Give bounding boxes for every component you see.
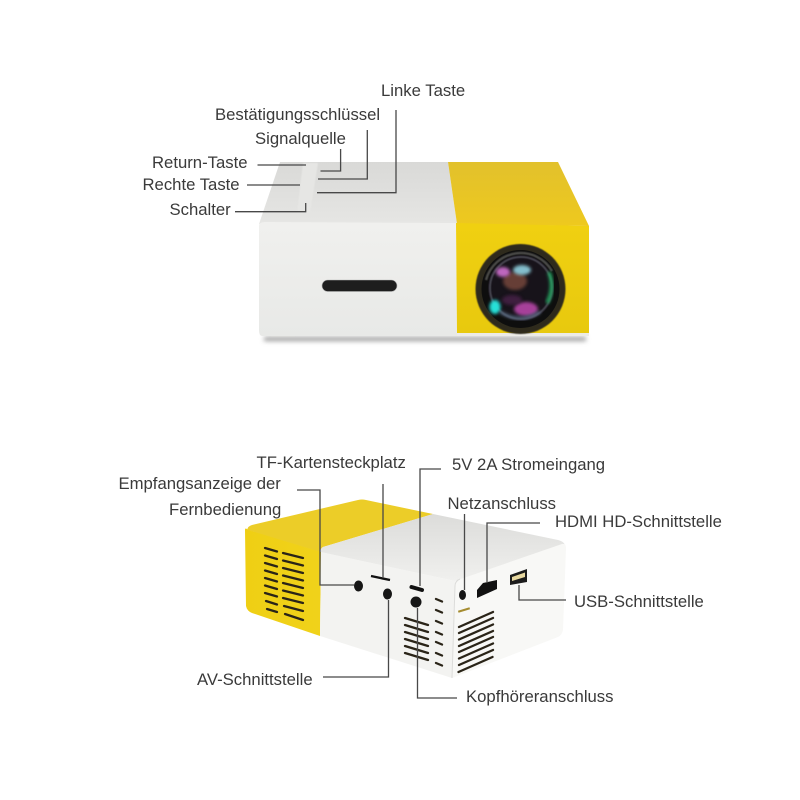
label: Bestätigungsschlüssel [215,105,380,179]
yellow front face [456,223,589,333]
label: Kopfhöreranschluss: Kopfhöreranschluss [466,687,614,706]
label: AV-Schnittstelle [197,600,388,689]
end face edge [452,579,460,678]
label: TF-Kartensteckplatz: TF-Kartensteckplatz [256,453,406,472]
shadow [264,337,586,341]
white top face [259,162,457,224]
lens [476,244,566,334]
label: Signalquelle: Signalquelle [255,129,346,148]
label: Return-Taste: Return-Taste [152,153,248,172]
label: Bestätigungsschlüssel: Bestätigungsschlüssel [215,105,380,124]
speaker slot [322,280,397,292]
front projector illustration [259,162,589,341]
end ports [459,590,466,600]
side vents [405,618,428,660]
label: USB-Schnittstelle: USB-Schnittstelle [574,592,704,611]
label: Schalter [170,200,306,219]
feet [268,333,572,337]
end vents [458,612,493,672]
label: Netzanschluss: Netzanschluss [448,494,556,513]
label: Linke Taste [317,81,465,193]
label: Kopfhöreranschluss [418,608,614,706]
label: HDMI HD-Schnittstelle: HDMI HD-Schnittstelle [555,512,722,531]
label: Linke Taste: Linke Taste [381,81,465,100]
side ports [354,580,363,592]
label: Netzanschluss [448,494,556,590]
label: Empfangsanzeige der Fernbedienung: Empfangsanzeige der [118,474,281,493]
yellow top face [247,500,433,552]
label: 5V 2A Stromeingang: 5V 2A Stromeingang [452,455,605,474]
bottom edge [457,333,589,336]
label: AV-Schnittstelle: AV-Schnittstelle [197,670,313,689]
white front face [259,222,457,336]
yellow face vents [265,548,303,620]
white top face [320,514,565,581]
rear projector illustration [245,500,566,678]
label: Empfangsanzeige der Fernbedienung [118,474,354,585]
label: Schalter: Schalter [170,200,231,219]
label: Empfangsanzeige der Fernbedienung: Fernbedienung [169,500,281,519]
label: Rechte Taste: Rechte Taste [142,175,240,194]
white end face [452,544,566,678]
yellow side face [245,528,321,636]
yellow top face [448,162,589,226]
label: USB-Schnittstelle [519,585,704,611]
white side face [320,552,455,678]
label: Signalquelle [255,129,346,171]
label: 5V 2A Stromeingang [420,455,605,586]
button strip [297,163,318,213]
label: HDMI HD-Schnittstelle [487,512,722,583]
